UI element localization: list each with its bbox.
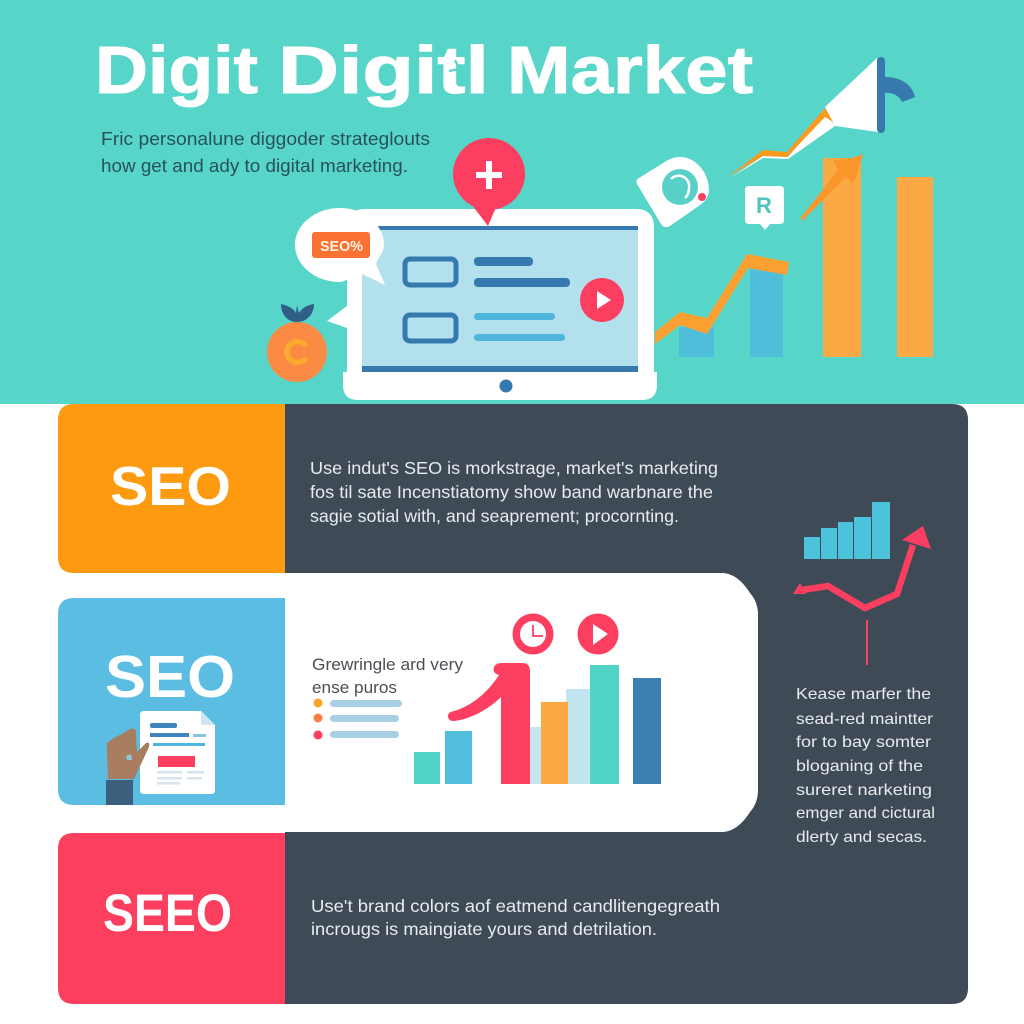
panel: teal hero header [0, 0, 1024, 404]
arrow: red zigzag trend [793, 526, 931, 608]
text block: third row [311, 896, 720, 939]
intro text: Fric personalune diggoder strateglouts [101, 129, 430, 149]
arrow: red rising column [448, 663, 530, 784]
panel: blue SEO block: SEO [105, 644, 235, 710]
icon: document [140, 711, 215, 794]
pointer line [866, 620, 868, 665]
text block: third row: Use't brand colors aof eatmend candlitengegreath [311, 896, 720, 916]
legend list [314, 698, 402, 740]
text block: right column: Kease marfer the [796, 686, 931, 703]
text block: right column: bloganing of the [796, 758, 923, 775]
icon: orange fruit coin [267, 304, 327, 382]
icon: R badge: R [756, 193, 772, 218]
callout: SEO% speech bubble: SEO% [320, 238, 363, 255]
text block: right column: sead-red maintter [796, 711, 934, 728]
text block: middle row [312, 656, 464, 697]
icon: laptop [327, 209, 657, 400]
icon: R badge [745, 186, 784, 230]
text block: first row [310, 458, 718, 526]
panel: blue SEO block [58, 598, 285, 805]
intro text: how get and ady to digital marketing. [101, 156, 408, 176]
icon: clock [512, 614, 554, 654]
intro text [101, 129, 430, 176]
panel: dark content background [285, 404, 968, 1004]
text block: middle row: Grewringle ard very [312, 656, 464, 674]
title: Digitl [278, 33, 489, 108]
title: Digit [95, 33, 258, 108]
text block: first row: Use indut's SEO is morkstrage, market's marketing [310, 458, 718, 478]
bar chart: hero growth bars [679, 158, 933, 357]
panel: white middle row [0, 573, 758, 832]
text block: right column: emger and cictural [796, 805, 935, 822]
text block: right column: for to bay somter [796, 734, 932, 751]
bar chart: middle row [414, 663, 661, 784]
text block: middle row: ense puros [312, 679, 397, 697]
title: Market [507, 33, 753, 108]
callout: SEO% speech bubble [295, 208, 385, 285]
text block: right column: sureret narketing [796, 782, 932, 799]
text block: third row: incrougs is maingiate yours and detrilation. [311, 919, 657, 939]
bar chart: small right-hand bars [804, 502, 890, 559]
arrow: orange up arrow [800, 154, 863, 220]
icon: plus pin [453, 138, 525, 226]
arrow: orange trend line over bars [655, 254, 789, 344]
panel: third row SEEO: SEEO [103, 884, 232, 943]
panel: first row SEO [58, 404, 718, 573]
icon: hand holding document [106, 728, 149, 805]
text block: right column: dlerty and secas. [796, 829, 927, 846]
icon: play button [578, 614, 618, 654]
panel: first row SEO: SEO [110, 455, 231, 517]
panel: third row SEEO [58, 833, 720, 1004]
text block: right column [796, 686, 935, 846]
title [95, 33, 753, 108]
text block: first row: fos til sate Incenstiatomy show band warbnare the [310, 482, 713, 502]
icon: megaphone with trend line [728, 57, 915, 178]
text block: first row: sagie sotial with, and seaprement; procornting. [310, 506, 679, 526]
icon: camera tag [636, 157, 709, 227]
icon: play button on laptop [580, 278, 624, 322]
